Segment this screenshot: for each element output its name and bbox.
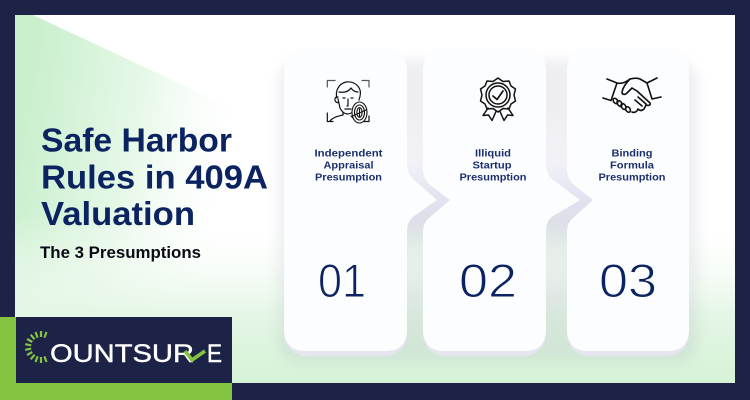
subtitle: The 3 Presumptions bbox=[40, 243, 201, 262]
card shadows and gaps bbox=[278, 60, 698, 362]
card label: Presumption bbox=[315, 172, 382, 184]
title: Rules in 409A bbox=[41, 158, 268, 196]
icon: logo ring of ticks bbox=[25, 331, 46, 363]
icon: handshake bbox=[603, 78, 661, 113]
panel: card 3 bbox=[567, 48, 689, 356]
card label: Presumption bbox=[598, 172, 666, 184]
step number: 02 bbox=[459, 254, 517, 307]
card label bbox=[598, 148, 666, 184]
card label: Formula bbox=[610, 160, 654, 172]
icon: face with fingerprint bbox=[327, 80, 369, 123]
card label: Independent bbox=[314, 148, 383, 160]
panel: card 1 bbox=[284, 48, 437, 356]
card label: Appraisal bbox=[324, 160, 374, 172]
panel: logo block bbox=[0, 317, 232, 400]
step number: 01 bbox=[318, 254, 366, 307]
panel: card 2 bbox=[423, 48, 580, 356]
card label: Illiquid bbox=[475, 148, 511, 160]
step number: 03 bbox=[599, 254, 657, 307]
logo wordmark: OUNTSUR bbox=[50, 340, 194, 368]
title: Valuation bbox=[41, 195, 195, 232]
card label: Binding bbox=[612, 148, 652, 160]
card label bbox=[314, 148, 383, 184]
title: Safe Harbor bbox=[41, 122, 232, 158]
icon: award badge bbox=[480, 78, 516, 120]
card label: Startup bbox=[472, 160, 512, 172]
card label: Presumption bbox=[460, 172, 526, 184]
icon: logo check mark bbox=[185, 351, 205, 360]
logo final letter: E bbox=[207, 340, 222, 368]
title bbox=[41, 122, 268, 232]
card label bbox=[460, 148, 526, 184]
